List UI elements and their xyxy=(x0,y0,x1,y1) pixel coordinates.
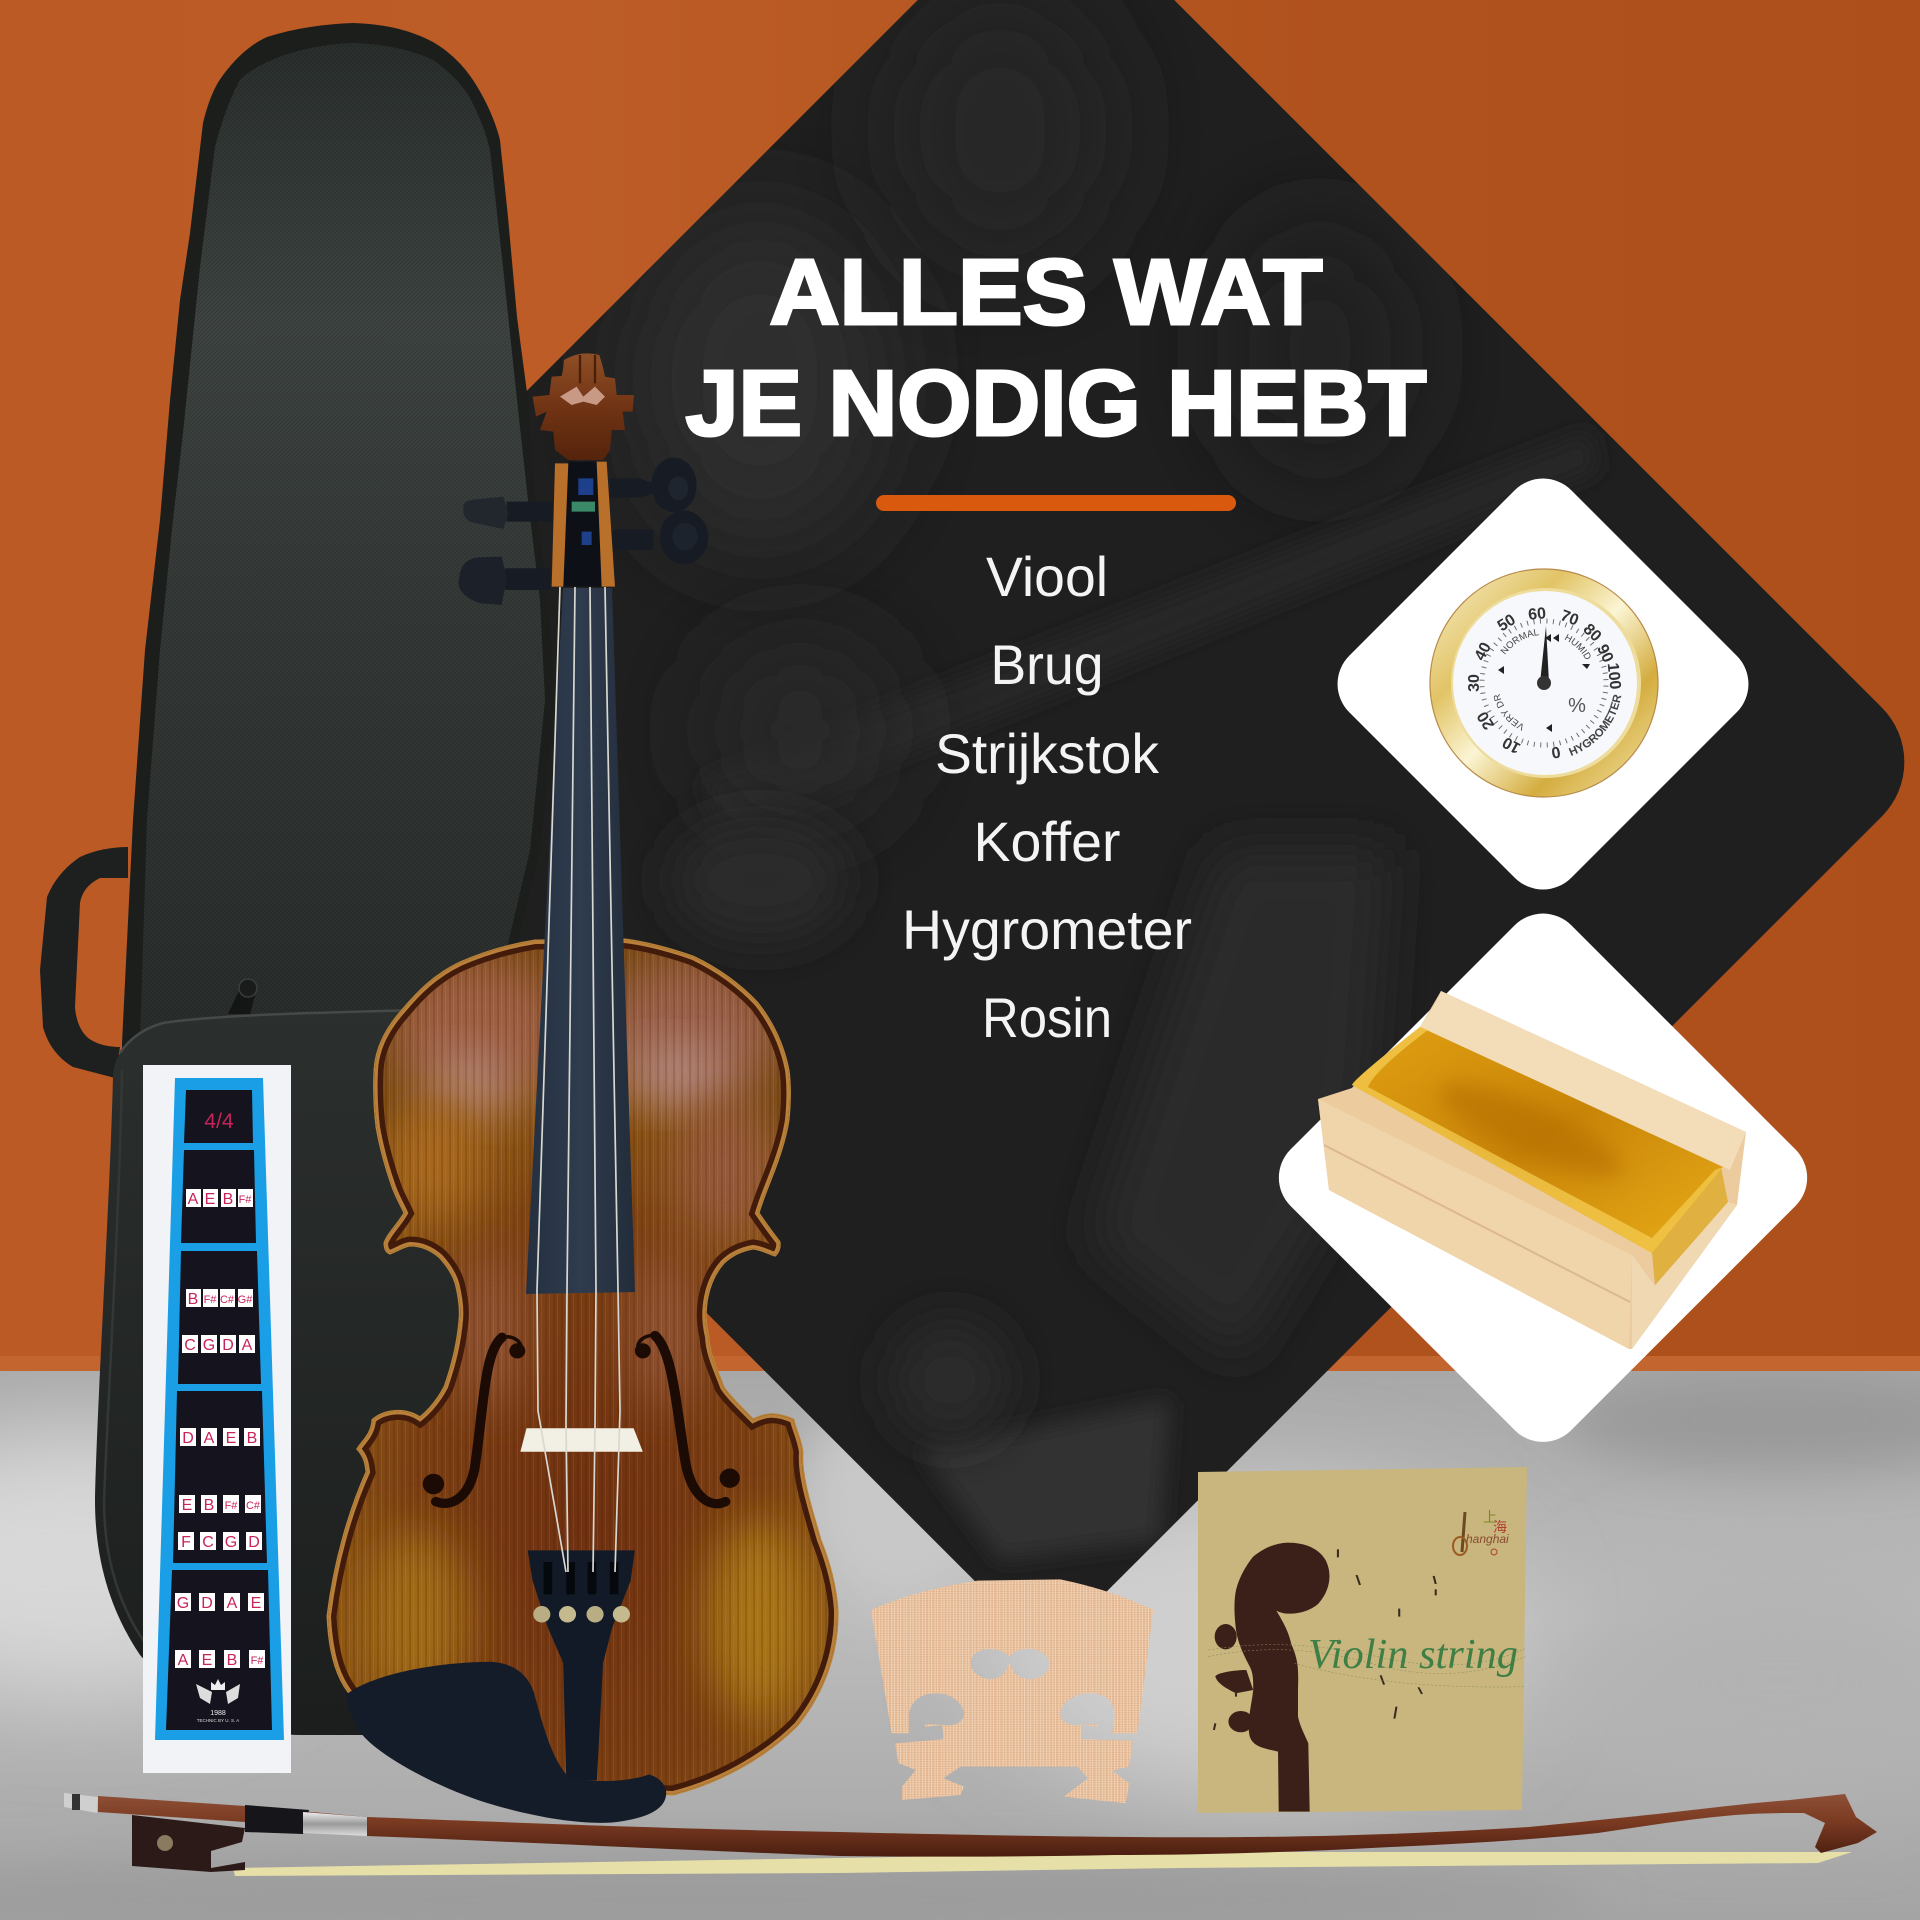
title xyxy=(686,240,1426,455)
scroll xyxy=(533,353,634,460)
fingering sticker: F# xyxy=(204,1294,217,1306)
fingering sticker: G xyxy=(203,1337,215,1354)
fingering sticker: A xyxy=(204,1430,215,1447)
orange divider bar xyxy=(876,495,1236,511)
pegbox xyxy=(562,462,605,587)
fingering sticker: B xyxy=(223,1191,233,1208)
wavy dotted lines xyxy=(1208,1645,1525,1687)
case zip puller xyxy=(228,979,257,1014)
case handle xyxy=(40,847,128,1078)
violin body xyxy=(320,930,850,1800)
fingering sticker: A xyxy=(227,1595,238,1612)
fingering sticker: F# xyxy=(239,1194,252,1206)
logo: crown and wings: TECHNIC BY U. S. A xyxy=(197,1718,239,1723)
fingering sticker: D xyxy=(182,1430,194,1447)
icon: hygrometer dial: HYGROMETER xyxy=(1568,694,1622,756)
case lower pocket xyxy=(95,1010,520,1735)
maple bridge xyxy=(871,1579,1153,1803)
icon: hygrometer dial: VERY DRY xyxy=(1494,694,1523,731)
fingering sticker: B xyxy=(247,1430,257,1447)
white diamond: rosin xyxy=(1262,897,1824,1458)
scroll silhouette xyxy=(1215,1543,1329,1812)
icon: hygrometer dial: 100 xyxy=(1604,662,1623,690)
violin xyxy=(320,353,850,1823)
fingering sticker xyxy=(143,1065,291,1773)
fingering sticker: A xyxy=(178,1652,189,1669)
bow grip xyxy=(245,1805,309,1834)
violin head and pegs drawn in zoom units xyxy=(458,353,708,605)
brand logo: 上 xyxy=(1483,1507,1497,1527)
bow silver winding xyxy=(303,1812,367,1836)
icon: hygrometer dial: 0 xyxy=(1550,742,1562,761)
fingering sticker: 4/4 xyxy=(204,1110,234,1133)
grey concrete floor xyxy=(0,1370,1920,1920)
fingering sticker: G xyxy=(225,1534,237,1551)
bow button xyxy=(64,1793,98,1813)
bow xyxy=(64,1793,1877,1876)
icon: hygrometer dial: 20 xyxy=(1474,708,1498,732)
title: JE NODIG HEBT xyxy=(686,351,1426,455)
fingering sticker: C# xyxy=(246,1500,261,1512)
icon: hygrometer dial: NORMAL xyxy=(1500,629,1539,654)
orange wall background xyxy=(0,0,1920,1371)
fingering sticker: G# xyxy=(238,1294,253,1306)
fingering sticker: D xyxy=(248,1534,260,1551)
brand logo: hanghai xyxy=(1466,1532,1509,1546)
icon: hygrometer dial: 40 xyxy=(1472,640,1495,663)
title: ALLES WAT xyxy=(770,240,1322,344)
right f-hole xyxy=(636,1335,739,1504)
fingering sticker: G xyxy=(177,1595,189,1612)
icon: hygrometer dial: 60 xyxy=(1527,605,1547,624)
fingering sticker: E xyxy=(251,1595,261,1612)
fingering sticker: F xyxy=(181,1534,191,1551)
list of included items: Viool xyxy=(986,545,1108,608)
icon: hygrometer dial: 90 xyxy=(1593,642,1616,665)
fingering sticker: B xyxy=(204,1497,214,1514)
fingering sticker: D xyxy=(222,1337,234,1354)
fingering sticker: F# xyxy=(225,1500,238,1512)
fingering sticker: C xyxy=(184,1337,196,1354)
note tiles xyxy=(175,1189,265,1668)
icon: hygrometer dial: 50 xyxy=(1495,611,1519,635)
fingering sticker: D xyxy=(201,1595,213,1612)
bow frog xyxy=(132,1815,245,1872)
dandelion seeds xyxy=(1214,1549,1436,1730)
white diamond: hygrometer xyxy=(48,23,1748,946)
icon: hygrometer dial: 70 xyxy=(1558,607,1581,630)
violin case xyxy=(40,23,555,1735)
brand logo xyxy=(1453,1507,1509,1555)
dark diamond panel with faded violinist photo xyxy=(518,0,1904,1592)
fingering sticker: C xyxy=(202,1534,214,1551)
fingering sticker: A xyxy=(242,1337,253,1354)
violin details drawn in zoom units xyxy=(346,1335,739,1823)
icon: hygrometer dial xyxy=(1429,568,1659,798)
list of included items: Brug xyxy=(990,633,1104,696)
list of included items: Strijkstok xyxy=(935,722,1160,785)
fingering sticker: B xyxy=(188,1291,198,1308)
fingering sticker: E xyxy=(205,1191,215,1208)
brand logo: 海 xyxy=(1493,1517,1507,1537)
fingering sticker: A xyxy=(188,1191,199,1208)
fingerboard xyxy=(526,588,635,1294)
fingering sticker: B xyxy=(227,1652,237,1669)
pegs xyxy=(458,458,708,605)
fingering sticker: F# xyxy=(251,1655,264,1667)
icon: hygrometer dial: % xyxy=(1568,695,1586,717)
tailpiece xyxy=(528,1550,635,1780)
label: Violin string: Violin string xyxy=(1308,1632,1518,1678)
bow hair xyxy=(233,1852,1852,1876)
violin bridge xyxy=(520,1428,643,1452)
list of included items: Koffer xyxy=(974,810,1120,873)
list of included items xyxy=(902,545,1192,1049)
fingering sticker: E xyxy=(226,1430,236,1447)
string packet xyxy=(1198,1467,1527,1813)
logo: crown and wings: 1988 xyxy=(210,1710,226,1717)
case upper shell xyxy=(122,23,555,1060)
logo: crown and wings xyxy=(196,1679,240,1723)
fingering sticker: E xyxy=(182,1497,192,1514)
icon: hygrometer dial: 10 xyxy=(1500,733,1524,756)
list of included items: Hygrometer xyxy=(902,898,1192,961)
chinrest xyxy=(346,1662,666,1823)
icon: hygrometer dial: 30 xyxy=(1466,674,1483,692)
strings xyxy=(537,587,620,1572)
fingering sticker: C# xyxy=(220,1294,235,1306)
icon: rosin in wooden block xyxy=(1318,991,1746,1349)
fingering sticker: E xyxy=(202,1652,212,1669)
left f-hole xyxy=(424,1337,524,1503)
bow stick xyxy=(98,1794,1877,1857)
icon: hygrometer dial: HUMID xyxy=(1564,634,1590,659)
icon: hygrometer dial: 80 xyxy=(1580,621,1604,645)
list of included items: Rosin xyxy=(982,986,1112,1049)
